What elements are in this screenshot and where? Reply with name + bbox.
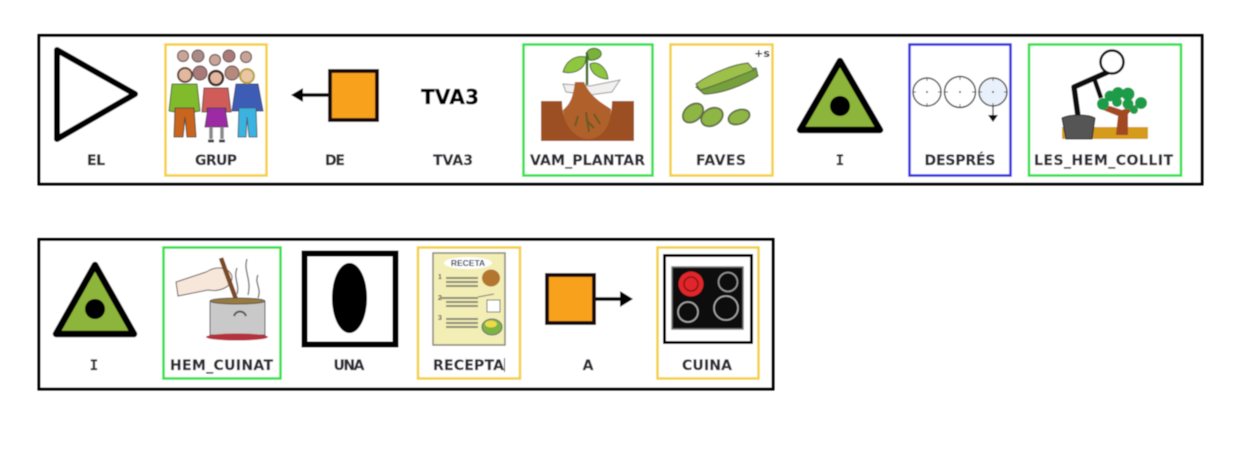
symbol: TVA3	[421, 85, 479, 169]
card: FAVES: +s	[754, 47, 770, 60]
card: VAM_PLANTAR: VAM_PLANTAR	[530, 153, 645, 169]
card: LES_HEM_COLLIT	[1029, 44, 1181, 176]
symbol: EL: EL	[87, 153, 105, 169]
panel: second sentence strip	[39, 240, 773, 389]
card: RECEPTA: 1	[438, 274, 442, 281]
symbol: I	[800, 61, 880, 169]
card: RECEPTA: RECEPTA	[433, 358, 504, 374]
symbol: I: I	[836, 153, 844, 169]
symbol: EL	[57, 50, 135, 169]
card: FAVES: FAVES	[696, 153, 746, 169]
card: LES_HEM_COLLIT: LES_HEM_COLLIT	[1034, 153, 1173, 169]
card: CUINA: CUINA	[682, 358, 732, 374]
symbol: TVA3: TVA3	[421, 85, 479, 109]
symbol: A: A	[583, 358, 594, 374]
card: DESPRÉS	[910, 44, 1010, 176]
symbol: UNA	[304, 254, 396, 374]
card: GRUP	[166, 44, 266, 176]
card: GRUP: GRUP	[195, 153, 237, 169]
card: DESPRÉS: DESPRÉS	[924, 152, 996, 169]
card: FAVES	[670, 44, 772, 176]
card: HEM_CUINAT: HEM_CUINAT	[170, 358, 273, 374]
panel: first sentence strip	[39, 36, 1202, 184]
symbol: DE: DE	[325, 153, 345, 169]
card: CUINA	[658, 248, 758, 378]
symbol: TVA3: TVA3	[433, 153, 473, 169]
symbol: I (second)	[56, 265, 134, 374]
card: RECEPTA: RECETA	[451, 258, 485, 268]
card: VAM_PLANTAR	[524, 44, 652, 176]
symbol: A	[547, 275, 633, 374]
symbol: DE	[291, 71, 377, 169]
card: RECEPTA	[418, 248, 520, 378]
symbol: I (second): I	[90, 358, 98, 374]
symbol: UNA: UNA	[334, 358, 365, 374]
card: RECEPTA: 2	[438, 295, 442, 302]
card: HEM_CUINAT	[164, 248, 280, 378]
card: RECEPTA: 3	[438, 315, 442, 322]
